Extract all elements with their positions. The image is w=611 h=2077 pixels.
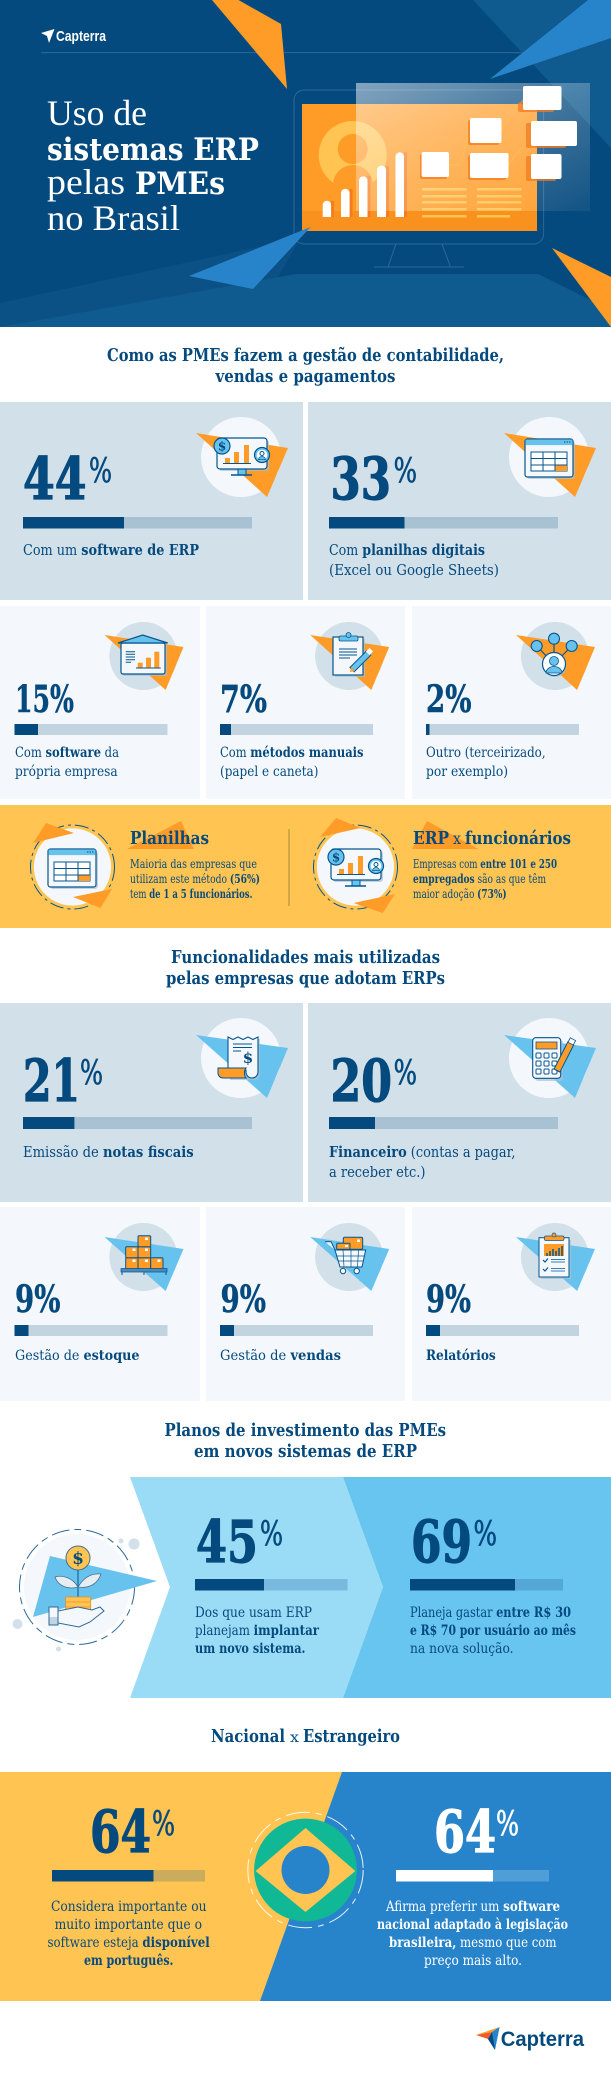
label: própria empresa xyxy=(15,764,118,780)
progress bar xyxy=(426,1325,579,1336)
label xyxy=(15,745,119,780)
callout: ERP x funcionários: funcionários xyxy=(465,828,571,849)
label: Planeja gastar entre R$ 30 xyxy=(410,1605,571,1621)
stat: 33%: % xyxy=(394,451,417,491)
panel: estoque xyxy=(0,1207,200,1401)
icon: calculator xyxy=(504,1018,596,1098)
heading: nacional x estrangeiro: Estrangeiro xyxy=(303,1726,400,1747)
stat: 45%: % xyxy=(260,1514,283,1554)
icon: receipt: $ xyxy=(243,1049,253,1067)
title: sistemas ERP xyxy=(47,132,259,168)
icon: spreadsheet xyxy=(504,417,596,497)
panel: 21% xyxy=(0,1003,303,1202)
callout: ERP x funcionários: empregados são as que têm xyxy=(413,872,546,886)
title xyxy=(47,93,259,238)
label: (Excel ou Google Sheets) xyxy=(329,561,499,579)
label xyxy=(377,1899,568,1969)
stat: 69%: % xyxy=(474,1514,497,1554)
progress bar xyxy=(23,517,252,528)
progress bar xyxy=(220,724,373,735)
callout: planilhas: utilizam este método (56%) xyxy=(130,872,260,886)
label: Gestão de estoque xyxy=(15,1348,140,1364)
label: Afirma preferir um software xyxy=(385,1899,560,1915)
icon: report clipboard xyxy=(516,1223,595,1291)
callout: ERP x funcionários: ERP xyxy=(413,828,449,849)
heading: nacional x estrangeiro: x xyxy=(290,1730,299,1746)
stat: 7%: 7% xyxy=(220,677,267,721)
heading: contabilidade: vendas e pagamentos xyxy=(215,366,396,387)
icon: bottom orange triangle xyxy=(552,248,611,327)
label xyxy=(426,745,546,780)
progress bar xyxy=(14,724,168,735)
label: por exemplo) xyxy=(426,764,508,780)
heading: funcionalidades: pelas empresas que adotam ERPs xyxy=(166,968,445,989)
heading: planos: Planos de investimento das PMEs xyxy=(164,1420,446,1441)
callout: planilhas: tem de 1 a 5 funcionários. xyxy=(130,887,252,901)
stat: 9%: 9% xyxy=(15,1277,60,1321)
stat: 44%: % xyxy=(89,451,112,491)
title: pelas xyxy=(47,162,125,202)
label: brasileira, mesmo que com xyxy=(389,1935,556,1951)
label xyxy=(195,1605,320,1657)
label: Financeiro (contas a pagar, xyxy=(329,1143,516,1161)
panel: 7% xyxy=(206,606,405,799)
panel: header xyxy=(0,0,611,327)
label xyxy=(329,1143,516,1181)
panel: relatórios xyxy=(412,1207,611,1401)
label: na nova solução. xyxy=(410,1641,514,1657)
icon: top orange triangle xyxy=(212,0,287,89)
stat: 33%: 33 xyxy=(330,445,391,513)
heading: planos: em novos sistemas de ERP xyxy=(194,1441,417,1462)
label: Com métodos manuais xyxy=(220,745,364,761)
heading: planos xyxy=(164,1420,446,1462)
stat: 20%: % xyxy=(394,1053,417,1093)
stat: 64% left: % xyxy=(152,1804,175,1844)
heading: nacional x estrangeiro xyxy=(211,1726,400,1747)
icon: plant and coins: $ xyxy=(72,1549,84,1569)
callout: planilhas xyxy=(127,821,260,901)
icon: house software xyxy=(104,622,184,690)
stat: 21%: % xyxy=(80,1053,103,1093)
label xyxy=(410,1605,576,1657)
stat: 64% right: % xyxy=(496,1804,519,1844)
icon: top blue triangle xyxy=(490,0,611,79)
logo: Capterra footer: Capterra xyxy=(501,2028,584,2051)
progress bar xyxy=(329,1117,558,1129)
heading: funcionalidades: Funcionalidades mais utilizadas xyxy=(171,947,440,968)
label: Gestão de vendas xyxy=(220,1348,341,1364)
stat: 15%: 15% xyxy=(15,677,74,721)
progress bar xyxy=(14,1325,168,1336)
icon: plant and coins xyxy=(12,1530,157,1652)
heading: funcionalidades xyxy=(166,947,445,989)
label: preço mais alto. xyxy=(424,1953,522,1969)
callout: planilhas: Maioria das empresas que xyxy=(130,857,257,871)
icon: network xyxy=(516,622,595,690)
callout: ERP x funcionários: maior adoção (73%) xyxy=(413,887,507,901)
stat: 21%: 21 xyxy=(23,1047,80,1115)
chevron: 69% xyxy=(343,1477,611,1698)
label: Dos que usam ERP xyxy=(195,1605,312,1621)
progress bar xyxy=(426,724,579,735)
label: muito importante que o xyxy=(55,1917,202,1933)
panel: 2% xyxy=(412,606,611,799)
progress bar xyxy=(23,1117,252,1129)
icon: clipboard and pencil xyxy=(310,622,389,690)
stat: 20%: 20 xyxy=(330,1047,392,1115)
panel: nacional x estrangeiro xyxy=(0,1772,611,2001)
panel: 15% xyxy=(0,606,200,799)
progress bar xyxy=(52,1870,205,1882)
title: Uso de xyxy=(47,93,147,133)
callout: planilhas: Planilhas xyxy=(130,828,209,849)
label xyxy=(220,745,364,780)
callout: ERP x funcionários xyxy=(412,821,571,901)
label: Considera importante ou xyxy=(51,1899,206,1915)
panel: yellow callouts xyxy=(0,805,611,928)
title: PMEs xyxy=(135,166,225,202)
label: Com um software de ERP xyxy=(23,541,199,559)
stat: 69%: 69 xyxy=(411,1508,472,1576)
stat: 64% left: 64 xyxy=(90,1798,151,1866)
heading: contabilidade xyxy=(107,345,504,387)
label xyxy=(48,1899,210,1969)
progress bar xyxy=(220,1325,373,1336)
progress bar xyxy=(396,1870,549,1882)
icon: planilhas badge xyxy=(30,823,114,909)
label: software esteja disponível xyxy=(48,1935,210,1951)
panel: investimento xyxy=(12,1477,611,1698)
logo: Capterra white: Capterra xyxy=(56,28,107,45)
progress bar xyxy=(329,517,558,528)
callout: ERP x funcionários: x xyxy=(453,829,461,848)
heading: nacional x estrangeiro: Nacional xyxy=(211,1726,285,1747)
icon: Brazil flag xyxy=(248,1812,363,1928)
panel: 44% xyxy=(0,402,303,600)
stat: 2%: 2% xyxy=(426,677,472,721)
callout: ERP x funcionários: Empresas com entre 101 e 250 xyxy=(413,857,557,871)
icon: ERP badge xyxy=(314,818,398,913)
label: Relatórios xyxy=(426,1348,496,1364)
label: (papel e caneta) xyxy=(220,764,318,780)
label: a receber etc.) xyxy=(329,1163,426,1181)
title: no Brasil xyxy=(47,198,180,238)
chevron: 45% xyxy=(130,1477,383,1698)
stat: 44%: 44 xyxy=(23,445,86,513)
icon: monitor xyxy=(196,417,288,497)
icon: boxes xyxy=(104,1223,184,1291)
stat: 9%: 9% xyxy=(220,1277,266,1321)
progress bar xyxy=(195,1579,348,1590)
panel: 20% xyxy=(308,1003,611,1202)
label: Outro (terceirizado, xyxy=(426,745,546,761)
label xyxy=(329,541,499,579)
panel: 33% xyxy=(308,402,611,600)
label: Emissão de notas fiscais xyxy=(23,1143,194,1161)
label: em português. xyxy=(84,1953,173,1969)
label: planejam implantar xyxy=(195,1623,320,1639)
yellow half xyxy=(0,1772,342,2001)
stat: 45%: 45 xyxy=(196,1508,258,1576)
illustration: monitor dashboard xyxy=(294,83,590,267)
icon: receipt xyxy=(196,1018,288,1098)
label: Com planilhas digitais xyxy=(329,541,485,559)
stat: 9%: 9% xyxy=(426,1277,471,1321)
icon: shopping cart xyxy=(310,1223,389,1291)
stat: 64% right: 64 xyxy=(434,1798,496,1866)
label: um novo sistema. xyxy=(195,1641,306,1657)
heading: contabilidade: Como as PMEs fazem a gestão de contabilidade, xyxy=(107,345,504,366)
progress bar xyxy=(410,1579,563,1590)
panel: vendas xyxy=(206,1207,405,1401)
label: Com software da xyxy=(15,745,119,761)
logo: Capterra white xyxy=(41,28,107,45)
icon: bottom blue triangle xyxy=(189,227,311,289)
